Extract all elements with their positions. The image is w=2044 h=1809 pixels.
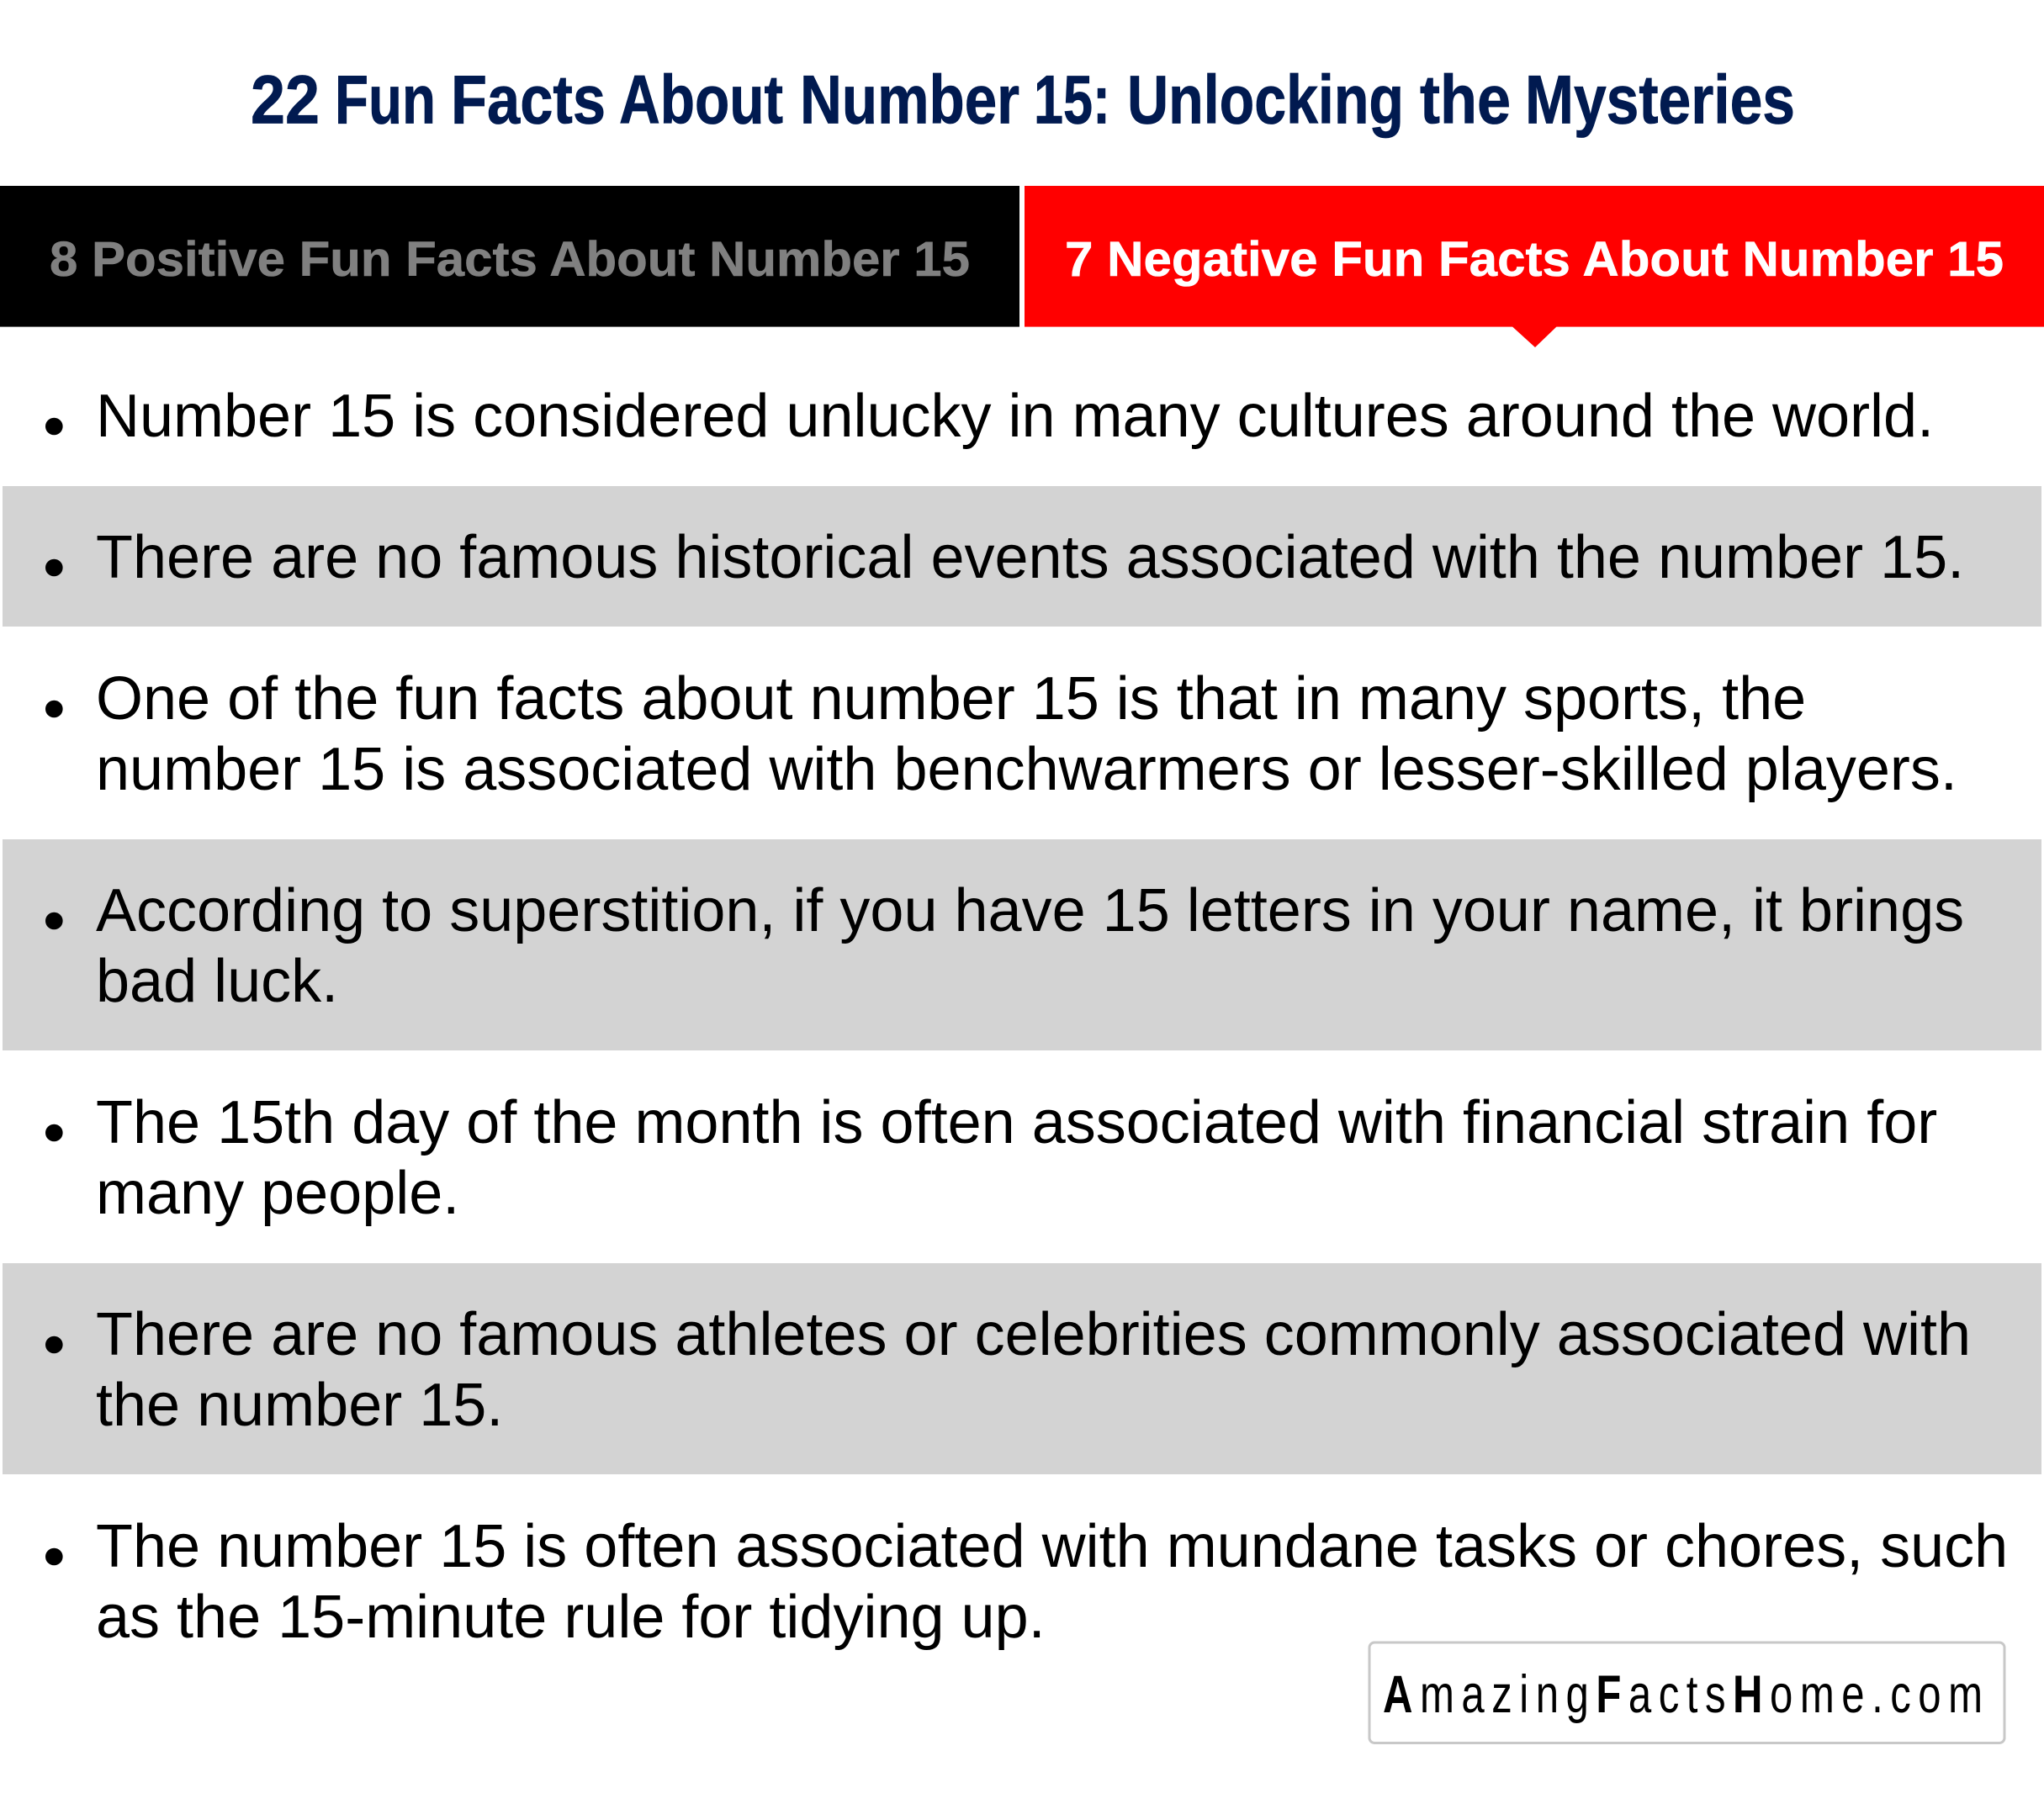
title: About [619,62,783,139]
fact 6 row [3,1263,2041,1474]
fact 3: One of the fun facts about number 15 is that in many sports, the [96,665,1806,733]
fact 2 row: There are no famous historical events associated with the number 15. [96,524,1964,591]
tab: negative facts (active) with pointer [1025,186,2044,347]
fact 6 row: the number 15. [96,1372,503,1439]
fact 2 row [3,486,2041,627]
title: Mysteries [1525,62,1795,139]
tab: positive facts (inactive) [0,186,1019,327]
fact 5 [45,1089,1937,1227]
title: Facts [451,62,606,139]
fact 1: Number 15 is considered unlucky in many cultures around the world. [96,383,1934,450]
fact 6 row: There are no famous athletes or celebrities commonly associated with [96,1301,1971,1368]
title: the [1420,62,1511,139]
watermark: AmazingFactsHome.com [1369,1642,2004,1743]
fact 7: as the 15-minute rule for tidying up. [96,1584,1046,1651]
fact 7 [45,1513,2008,1651]
fact 3 [45,665,1957,803]
fact 7: The number 15 is often associated with mundane tasks or chores, such [96,1513,2008,1580]
tab: positive facts (inactive): 8 Positive Fun Facts About Number 15 [50,232,970,287]
fact 4 row: bad luck. [96,948,338,1015]
fact 5: many people. [96,1160,459,1227]
fact 4 row: According to superstition, if you have 15 letters in your name, it brings [96,877,1964,944]
tab: negative facts (active) with pointer: 7 Negative Fun Facts About Number 15 [1065,232,2004,287]
title: Number [800,62,1019,139]
title: Unlocking [1127,62,1404,139]
title: 22 [251,62,320,139]
title: Fun [335,62,436,139]
watermark: AmazingFactsHome.com: AmazingFactsHome.com [1383,1664,1990,1723]
fact 5: The 15th day of the month is often associated with financial strain for [96,1089,1937,1156]
title [251,62,1795,139]
fact 3: number 15 is associated with benchwarmers or lesser-skilled players. [96,736,1957,803]
fact 4 row [3,839,2041,1050]
title: 15: [1034,62,1110,139]
